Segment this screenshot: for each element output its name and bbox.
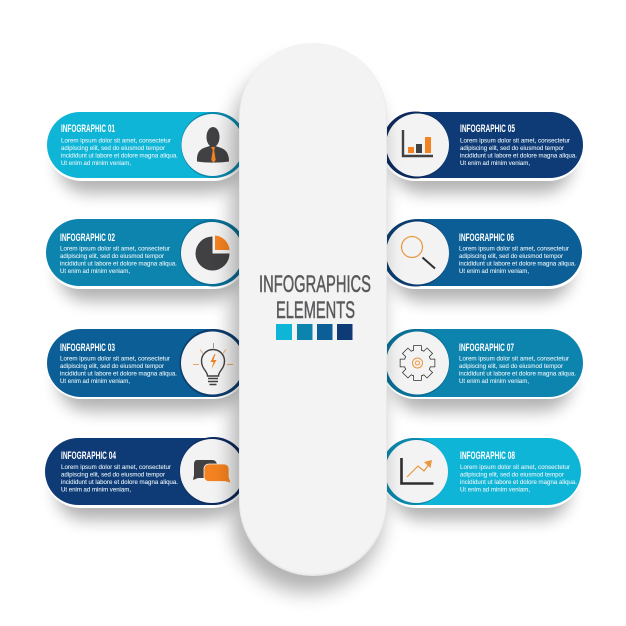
colour swatches (276, 324, 352, 340)
text block: infographic 06: Lorem ipsum dolor sit amet, consectetur (459, 246, 570, 252)
text block: infographic 08: Ut enim ad minim veniam, (460, 486, 530, 494)
panel: infographic 03 (46, 328, 249, 411)
icon: gear (400, 346, 434, 380)
icon: light bulb (193, 343, 233, 384)
icon: line chart (402, 458, 434, 484)
panel: centre capsule (232, 43, 387, 592)
heading: infographic 07: INFOGRAPHIC 07 (459, 342, 514, 354)
text block: infographic 03: incididunt ut labore et dolore magna aliqua. (60, 370, 177, 378)
text block: infographic 04: Lorem ipsum dolor sit amet, consectetur (61, 464, 172, 471)
text block: infographic 02: Lorem ipsum dolor sit amet, consectetur (60, 246, 171, 252)
panel: infographic 04 (44, 436, 249, 520)
text block: infographic 07: adipiscing elit, sed do eiusmod tempor (459, 363, 564, 370)
text block: infographic 03: Lorem ipsum dolor sit amet, consectetur (60, 356, 171, 362)
heading: infographic 01: INFOGRAPHIC 01 (61, 123, 115, 135)
icon: bar chart (403, 130, 433, 156)
text block: infographic 03: Ut enim ad minim veniam, (60, 378, 130, 385)
title: infographics elements: ELEMENTS (276, 297, 355, 324)
text block: infographic 06: incididunt ut labore et dolore magna aliqua. (459, 260, 576, 268)
panel: infographic 01 (46, 110, 249, 193)
panel: infographic 06 (380, 218, 584, 301)
heading: infographic 08: INFOGRAPHIC 08 (460, 450, 515, 462)
panel: infographic 08 (380, 436, 582, 520)
heading: infographic 03: INFOGRAPHIC 03 (60, 342, 115, 354)
text block: infographic 01: adipiscing elit, sed do eiusmod tempor (61, 145, 166, 152)
heading: infographic 02: INFOGRAPHIC 02 (60, 232, 115, 244)
text block: infographic 02: incididunt ut labore et dolore magna aliqua. (60, 260, 177, 268)
title: infographics elements: INFOGRAPHICS (259, 271, 371, 298)
text block: infographic 01: Ut enim ad minim veniam, (61, 160, 131, 167)
text block: infographic 02: adipiscing elit, sed do eiusmod tempor (60, 253, 165, 260)
icon: businessman (197, 127, 229, 163)
heading: infographic 04: INFOGRAPHIC 04 (61, 450, 117, 462)
panel: infographic 07 (380, 328, 584, 411)
text block: infographic 05: adipiscing elit, sed do eiusmod tempor (460, 145, 565, 152)
text block: infographic 07: Lorem ipsum dolor sit amet, consectetur (459, 356, 570, 362)
icon: speech bubbles (193, 460, 231, 483)
text block: infographic 05: incididunt ut labore et dolore magna aliqua. (460, 152, 577, 160)
title: infographics elements (259, 271, 371, 324)
heading: infographic 05: INFOGRAPHIC 05 (460, 123, 515, 135)
icon: pie chart (196, 236, 230, 270)
text block: infographic 06: adipiscing elit, sed do eiusmod tempor (459, 253, 564, 260)
text block: infographic 07: incididunt ut labore et dolore magna aliqua. (459, 370, 576, 378)
heading: infographic 06: INFOGRAPHIC 06 (459, 232, 514, 244)
text block: infographic 01: Lorem ipsum dolor sit amet, consectetur (61, 138, 172, 144)
text block: infographic 04: Ut enim ad minim veniam, (61, 486, 131, 494)
text block: infographic 02: Ut enim ad minim veniam, (60, 268, 130, 275)
text block: infographic 08: adipiscing elit, sed do eiusmod tempor (460, 472, 565, 478)
text block: infographic 05: Lorem ipsum dolor sit amet, consectetur (460, 138, 571, 144)
text block: infographic 01: incididunt ut labore et dolore magna aliqua. (61, 152, 178, 160)
panel: infographic 02 (45, 218, 249, 301)
text block: infographic 03: adipiscing elit, sed do eiusmod tempor (60, 363, 165, 370)
text block: infographic 04: incididunt ut labore et dolore magna aliqua. (61, 479, 178, 486)
text block: infographic 06: Ut enim ad minim veniam, (459, 268, 529, 275)
text block: infographic 07: Ut enim ad minim veniam, (459, 378, 529, 385)
panel: infographic 05 (380, 110, 584, 193)
text block: infographic 08: incididunt ut labore et dolore magna aliqua. (460, 479, 577, 486)
text block: infographic 05: Ut enim ad minim veniam, (460, 160, 530, 167)
icon: magnifying glass (402, 236, 435, 268)
text block: infographic 04: adipiscing elit, sed do eiusmod tempor (61, 472, 166, 478)
text block: infographic 08: Lorem ipsum dolor sit amet, consectetur (460, 464, 571, 471)
